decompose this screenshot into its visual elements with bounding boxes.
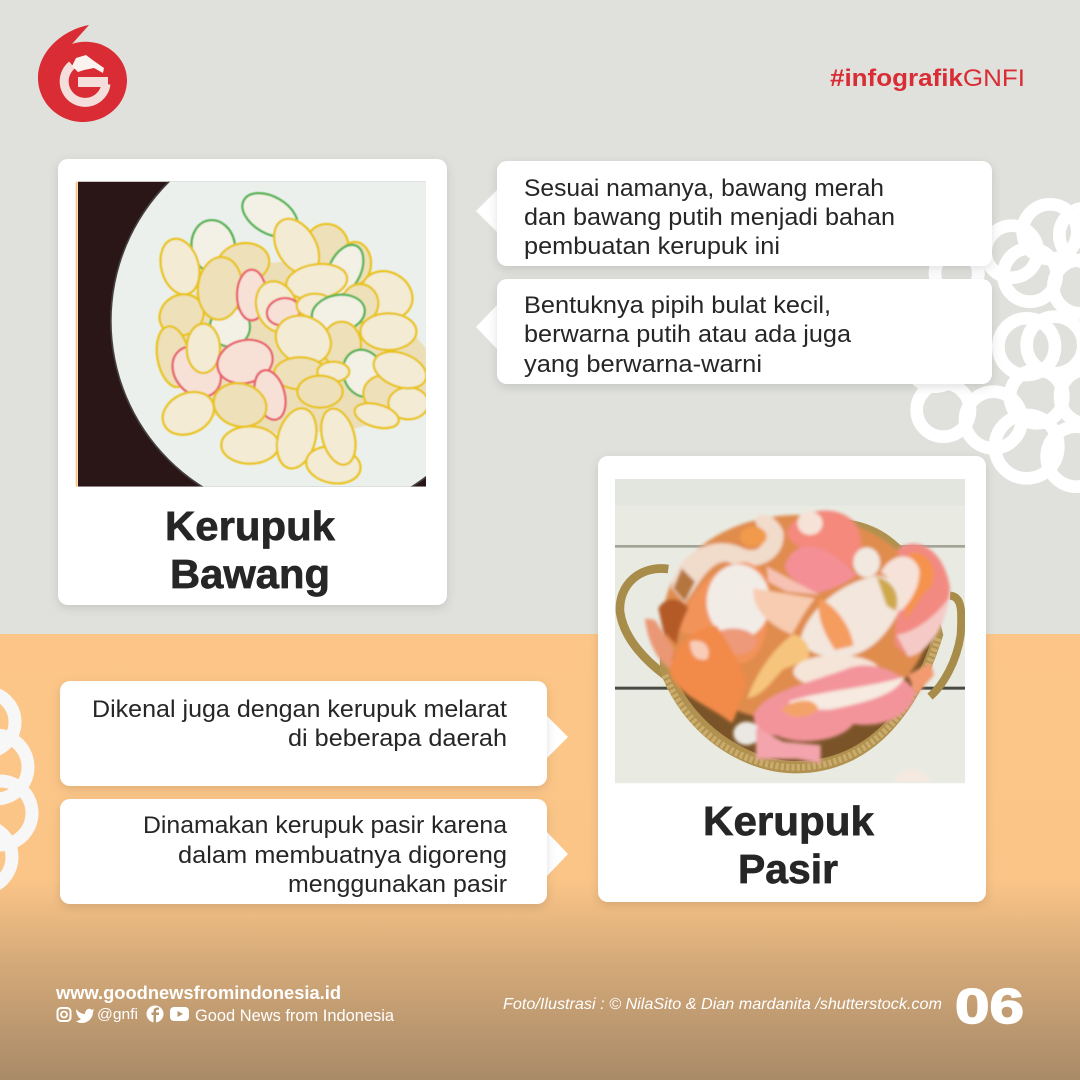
callout: asal nama kerupuk pasir: Dinamakan kerupuk pasir karena (143, 812, 507, 839)
callout: bentuk kerupuk bawang: berwarna putih atau ada juga (524, 321, 851, 348)
footer: social icons and handles: @gnfi (97, 1006, 138, 1023)
hashtag: #infografik GNFI (830, 65, 1025, 92)
title: kerupuk pasir: Pasir (738, 846, 838, 892)
callout: asal nama kerupuk pasir: menggunakan pasir (288, 871, 507, 898)
callout: asal nama kerupuk pasir: dalam membuatnya digoreng (178, 842, 507, 869)
photo: kerupuk bawang (76, 182, 426, 487)
callout: bentuk kerupuk bawang (476, 279, 992, 384)
title: kerupuk pasir (703, 798, 874, 892)
footer: website: www.goodnewsfromindonesia.id (55, 982, 341, 1003)
callout: bentuk kerupuk bawang: yang berwarna-warni (524, 351, 762, 378)
callout: kerupuk melarat: di beberapa daerah (288, 725, 507, 752)
photo: kerupuk pasir (615, 479, 965, 783)
panel: kerupuk pasir card (598, 456, 986, 902)
photo credit: Foto/Ilustrasi : © NilaSito & Dian mardanita /shutterstock.com (503, 996, 942, 1013)
panel: kerupuk bawang card (56, 159, 450, 610)
callout: bahan kerupuk bawang: pembuatan kerupuk ini (524, 233, 780, 260)
page number: 06 (955, 980, 1024, 1034)
callout: bahan kerupuk bawang: dan bawang putih menjadi bahan (524, 204, 895, 231)
background: grey top (0, 0, 1080, 634)
callout: bahan kerupuk bawang (476, 161, 992, 266)
background: orange gradient bottom (0, 634, 1080, 1080)
callout: bahan kerupuk bawang: Sesuai namanya, bawang merah (524, 175, 884, 202)
callout: asal nama kerupuk pasir (60, 799, 568, 904)
title: kerupuk bawang: Kerupuk (165, 503, 335, 549)
footer: social icons and handles (58, 1006, 395, 1025)
decorative rings: left (0, 692, 32, 889)
title: kerupuk bawang: Bawang (170, 551, 330, 597)
decorative rings: right (908, 204, 1080, 487)
callout: bentuk kerupuk bawang: Bentuknya pipih bulat kecil, (524, 292, 831, 319)
footer: social icons and handles: Good News from Indonesia (195, 1006, 395, 1025)
title: kerupuk bawang (165, 503, 335, 597)
callout: kerupuk melarat: Dikenal juga dengan kerupuk melarat (92, 696, 507, 723)
logo: GNFI (38, 25, 127, 122)
title: kerupuk pasir: Kerupuk (703, 798, 874, 844)
callout: kerupuk melarat (60, 681, 568, 786)
